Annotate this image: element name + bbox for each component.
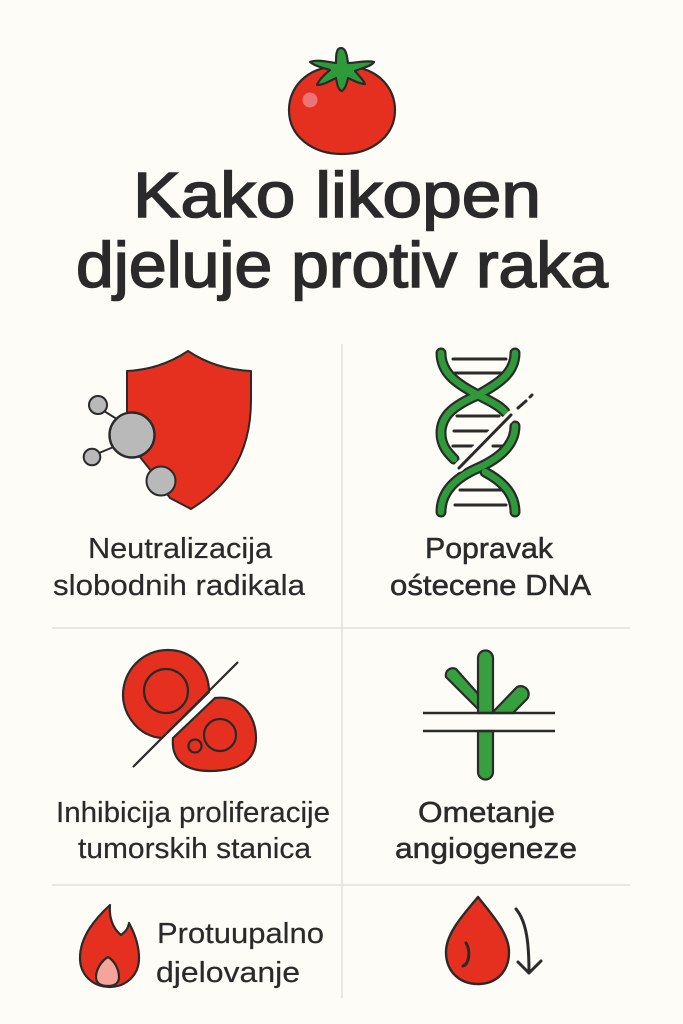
panel: blood drop decrease: [446, 897, 541, 984]
icon: flame: [80, 905, 139, 987]
panel: DNA repair: [390, 353, 592, 602]
label: DNA repair: [390, 533, 592, 602]
panel: angiogenesis: [395, 650, 577, 865]
label: DNA repair: ośtecene DNA: [390, 570, 592, 602]
title: Kako likopen: [133, 159, 541, 231]
label: proliferation: [56, 797, 330, 865]
panel: anti-inflammatory: [80, 905, 324, 989]
label: proliferation: tumorskih stanica: [78, 833, 312, 865]
label: angiogenesis: [395, 797, 577, 865]
label: angiogenesis: angiogeneze: [395, 833, 577, 865]
icon: down arrow: [516, 909, 541, 973]
label: free radicals: Neutralizacija: [88, 533, 273, 565]
icon: blood drop: [446, 897, 509, 984]
label: DNA repair: Popravak: [425, 533, 554, 565]
icon: shield with molecule: [84, 351, 251, 509]
label: free radicals: [53, 533, 306, 602]
label: free radicals: slobodnih radikala: [53, 570, 306, 602]
title: djeluje protiv raka: [76, 229, 608, 301]
label: anti-inflammatory: djelovanje: [156, 957, 300, 989]
icon: broken DNA helix: [441, 353, 532, 512]
label: angiogenesis: Ometanje: [418, 797, 555, 829]
icon: tomato: [289, 48, 395, 154]
icon: blocked blood vessel: [423, 650, 555, 780]
label: anti-inflammatory: [156, 918, 324, 989]
icon: divided cells: [123, 650, 256, 771]
panel: free radical neutralisation: [53, 351, 306, 602]
label: anti-inflammatory: Protuupalno: [157, 918, 324, 950]
title: [76, 159, 608, 301]
label: proliferation: Inhibicija proliferacije: [56, 797, 330, 829]
panel: tumour cell proliferation: [56, 650, 330, 865]
